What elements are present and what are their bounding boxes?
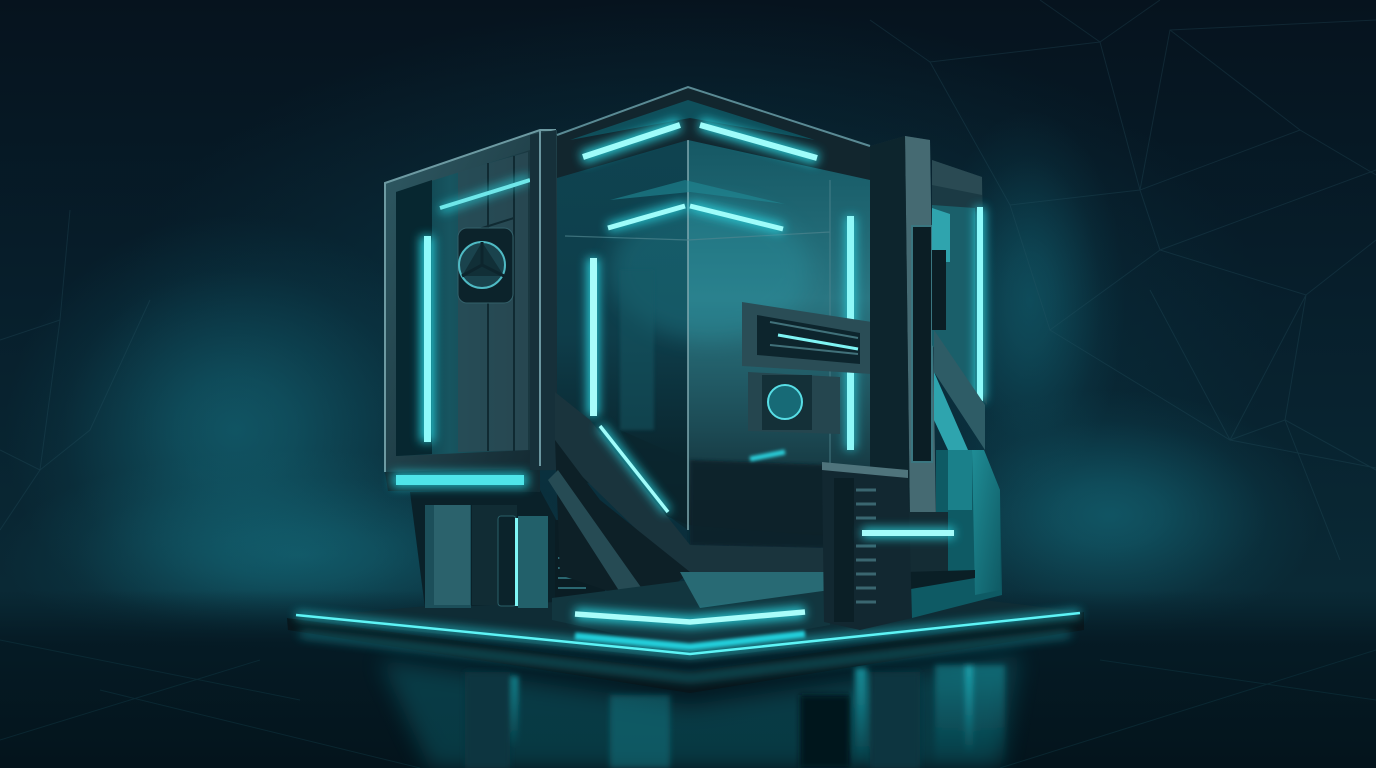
platform neon edge glow <box>296 613 1080 654</box>
left dark glass strip <box>396 180 432 456</box>
round vent icon <box>458 228 513 303</box>
roof frame <box>557 87 870 180</box>
lower front base <box>552 572 830 650</box>
housing light glow <box>862 528 954 538</box>
rear light <box>977 207 983 401</box>
platform <box>287 590 1084 693</box>
inner top light glow <box>608 206 783 229</box>
left cube module <box>385 130 557 492</box>
cube base machinery <box>410 490 605 608</box>
platform lower glow <box>300 634 1070 678</box>
housing slats <box>856 490 876 602</box>
inner left vertical glow <box>587 258 599 416</box>
fog: left cloud <box>0 215 600 660</box>
fog: right cloud <box>900 110 1320 640</box>
platform reflection on floor <box>380 655 1020 768</box>
left bottom light glow <box>392 472 528 488</box>
roof inner teal <box>570 100 815 140</box>
left outer frame <box>385 130 557 472</box>
slat light <box>778 335 858 349</box>
platform side <box>287 612 1084 693</box>
circular port module <box>748 372 840 434</box>
left top light glow <box>440 178 530 210</box>
inner left vertical light <box>590 258 597 416</box>
interior columns <box>620 270 654 430</box>
housing light <box>862 530 954 536</box>
left window <box>396 150 530 456</box>
tower column <box>870 136 936 525</box>
diagonal light <box>600 426 668 512</box>
glass left face <box>557 100 688 525</box>
glass edge <box>687 130 689 530</box>
left pillar light glow <box>420 236 434 442</box>
central glass cube <box>548 87 872 605</box>
left pillar light <box>424 236 431 442</box>
background glow behind cube <box>110 0 1270 680</box>
left bottom ledge <box>385 468 540 492</box>
corner post <box>530 130 557 470</box>
lower front second light <box>575 634 805 647</box>
glass right face <box>688 100 872 540</box>
left bottom light <box>396 475 524 485</box>
rear light glow <box>975 207 985 401</box>
floor <box>0 590 1376 768</box>
vent panel <box>425 505 471 608</box>
roof light glow <box>582 124 818 159</box>
rear diagonal strut <box>934 330 985 450</box>
floor seams <box>0 640 1376 768</box>
lower right blocks <box>822 450 1002 630</box>
lower front light <box>575 612 805 622</box>
background polygon network lines <box>0 0 1376 560</box>
inner top lights <box>608 206 783 229</box>
interior dark lower <box>690 460 830 548</box>
lower front light glow <box>575 612 805 622</box>
platform top <box>287 590 1084 660</box>
right tower <box>870 136 987 525</box>
roof lights <box>583 125 817 158</box>
platform neon edge <box>296 613 1080 654</box>
machinery housing <box>822 464 912 630</box>
base light <box>515 518 518 606</box>
inner right vertical glow <box>845 216 856 450</box>
inner right vertical light <box>847 216 854 450</box>
vent slat module <box>742 302 872 374</box>
diagonal light glow <box>600 426 668 512</box>
rear module <box>932 160 987 405</box>
interior glow <box>610 200 810 340</box>
left top light <box>440 180 530 208</box>
small accent light <box>750 452 785 459</box>
tower slot <box>912 226 932 462</box>
left frame highlight <box>385 130 556 472</box>
reflection: wide glow <box>380 655 1020 768</box>
reflection: streaks <box>465 665 1005 768</box>
diagonal frame <box>555 392 830 572</box>
inner teal bands <box>610 180 785 204</box>
left panel columns <box>458 152 528 452</box>
